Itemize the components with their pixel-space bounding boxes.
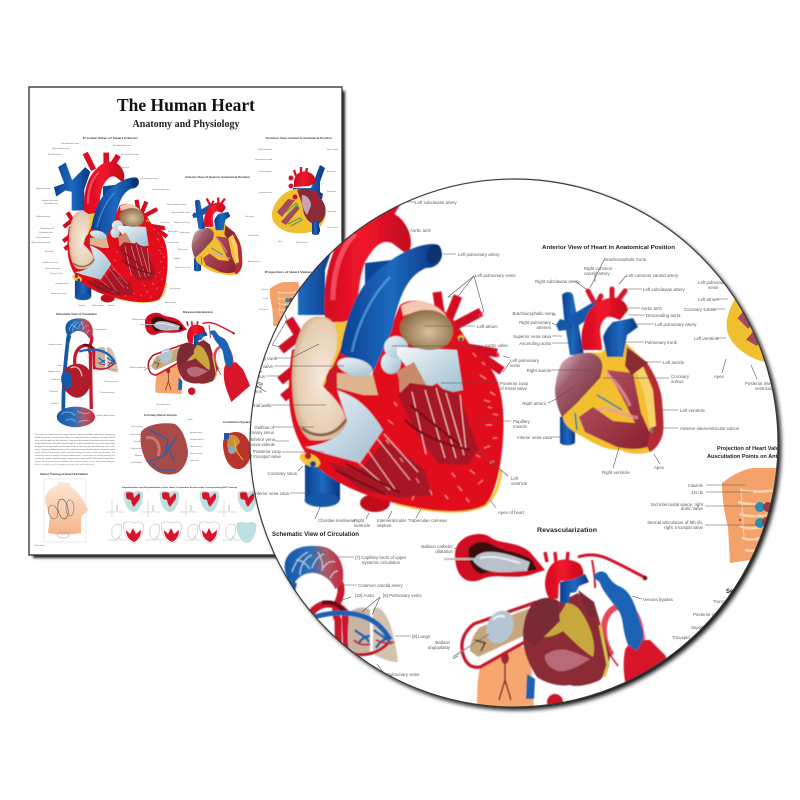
large heart labels: Left xyxy=(511,476,519,481)
large heart labels: Posterior cusp xyxy=(253,449,282,454)
valve projection title and labels: Auscultation Points on Anterior xyxy=(707,454,790,460)
poster: tiny anatomical labels: Conus arteriosus xyxy=(36,236,50,239)
poster: tiny anatomical labels: 2nd space xyxy=(259,309,268,311)
poster: explanatory paragraph: whose activity can be recorded on the body surface as the electrocardiogram. xyxy=(35,460,115,463)
anterior view labels: Coronary xyxy=(671,374,690,379)
large heart labels: Papillary xyxy=(513,419,531,424)
poster: tiny anatomical labels: Balloon angioplasty xyxy=(130,366,146,369)
poster: tiny anatomical labels: Circumflex xyxy=(133,440,142,443)
poster: explanatory paragraph xyxy=(35,433,116,466)
poster: tiny anatomical labels: Left coronary xyxy=(131,425,142,428)
anterior view labels: Left common carotid artery xyxy=(626,273,679,278)
large heart labels: cava valvule xyxy=(251,442,276,447)
poster: explanatory paragraph: atria and the right and left ventricles, separated by interatrial and interventricular septa. xyxy=(35,439,115,442)
anterior view labels: arteries xyxy=(536,325,552,330)
revascularization illustration xyxy=(444,534,680,725)
poster heading: anterior view: Anterior View of Heart in Anatomical Position xyxy=(185,175,250,179)
valve projection title and labels: 1st rib xyxy=(691,490,704,495)
valve projection title and labels: right, tricuspid valve xyxy=(664,525,704,530)
large heart labels xyxy=(230,200,540,528)
valve projection leaders xyxy=(705,485,757,525)
poster: tiny anatomical labels: Superior vena xyxy=(48,370,61,373)
poster: tiny anatomical labels: Stent placement xyxy=(156,403,170,406)
large heart labels: Pulmonary trunk xyxy=(245,356,278,361)
poster: tiny anatomical labels: Posterior vein xyxy=(130,447,142,450)
valve projection title and labels: Truncus xyxy=(713,599,730,604)
circulation leaders xyxy=(337,557,411,672)
posterior view labels xyxy=(684,280,776,391)
posterior view labels: Coronary sulcus xyxy=(684,307,717,312)
valve projection title and labels: Projection of Heart Valves xyxy=(717,446,785,452)
poster heading: projection of valves: Projection of Heart Valves and xyxy=(265,270,320,274)
poster: tiny anatomical labels: Pulmonary valve xyxy=(39,231,53,234)
poster heading: revascularization: Revascularization xyxy=(183,310,213,314)
large heart labels: Inferior vena cava xyxy=(254,491,290,496)
valve projection title and labels: Septal cusp xyxy=(691,625,715,630)
poster heart: posterior view xyxy=(272,165,326,235)
poster: explanatory paragraph: through the tricuspid valve into the right ventricle, then through the pulmonary valve to the xyxy=(35,445,116,448)
poster: tiny anatomical labels: Great cardiac xyxy=(131,433,142,436)
poster: tiny anatomical labels: Pulmonary trunk xyxy=(40,227,54,230)
poster: explanatory paragraph: Each cardiac cycle comprises systole and diastole. xyxy=(35,463,95,466)
large heart labels: Chordae tendineae xyxy=(318,518,356,523)
large heart labels: Right xyxy=(354,518,365,523)
poster: tiny anatomical labels: Small cardiac xyxy=(131,461,142,464)
large heart labels: of tricuspid valve xyxy=(248,454,282,459)
large heart labels: Posterior cusp xyxy=(500,381,529,386)
poster: explanatory paragraph: coronary arteries supply the myocardium itself. Contraction is coordinated by the xyxy=(35,454,116,457)
poster: EKG and conduction sequence xyxy=(106,491,257,543)
anterior view labels: Brachiocephalic veins xyxy=(513,311,556,316)
large heart labels: ventricle xyxy=(354,523,371,528)
circulation title and labels xyxy=(272,532,431,677)
poster: tiny anatomical labels: Left pulmonary artery xyxy=(140,177,158,180)
revascularization title and labels xyxy=(421,527,674,650)
poster: tiny anatomical labels xyxy=(31,142,338,547)
poster: tiny anatomical labels: Common carotid xyxy=(48,343,62,346)
poster heading: schematic circulation: Schematic View of Circulation xyxy=(56,312,97,316)
poster: tiny anatomical labels: Right common artery xyxy=(52,147,70,150)
poster heading: frontal view: Frontal View of Heart Interior xyxy=(83,136,139,140)
poster: tiny anatomical labels: Marginal artery xyxy=(190,452,203,455)
poster: tiny anatomical labels: Anterior artery xyxy=(190,431,202,434)
poster: tiny anatomical labels: Right subclavian xyxy=(258,148,272,151)
poster: tiny anatomical labels: Inferior vena cava xyxy=(175,266,191,269)
valve projection title and labels: Posterior cusp xyxy=(693,612,722,617)
poster: tiny anatomical labels: Left atrium xyxy=(160,221,169,224)
poster: tiny anatomical labels: Sinus xyxy=(278,241,283,243)
revascularization title and labels: Balloon xyxy=(435,640,451,645)
magnifier circle outline xyxy=(250,179,778,707)
large heart labels: Left pulmonary xyxy=(510,358,540,363)
poster: tiny anatomical labels: Right auricle xyxy=(179,231,190,234)
valve projection title and labels: Clavicle xyxy=(688,483,704,488)
large heart labels: Coronary sinus xyxy=(267,471,298,476)
poster: tiny anatomical labels: Right ventricle xyxy=(92,304,104,307)
large heart labels: muscle xyxy=(513,424,527,429)
poster: explanatory paragraph: conduction system: sinoatrial node, atrioventricular node, bundle of His and Purkinje fibers, xyxy=(35,457,115,460)
poster: tiny anatomical labels: Left subclavian artery xyxy=(121,153,139,156)
anterior view labels: Left subclavian artery xyxy=(643,287,686,292)
large heart labels: veins xyxy=(510,363,521,368)
poster: full anatomy chart xyxy=(29,87,345,558)
poster heart copy: anterior view xyxy=(192,198,242,275)
posterior view labels: veins xyxy=(708,285,719,290)
posterior view labels: Apex xyxy=(714,374,725,379)
poster: tiny anatomical labels: Apex of heart xyxy=(165,301,177,304)
poster heading: vector tracing: Vector Tracing of Heart Excitation xyxy=(40,472,88,476)
large heart frontal interior view xyxy=(260,191,503,512)
large heart labels: ventricle xyxy=(511,481,528,486)
anterior view leaders xyxy=(548,260,678,468)
posterior view leaders xyxy=(711,298,758,380)
anterior view labels: sulcus xyxy=(671,379,684,384)
anterior view heart xyxy=(555,289,663,454)
poster: tiny anatomical labels: Pulmonary xyxy=(49,390,58,393)
circulation title and labels: systemic circulation xyxy=(362,560,401,565)
poster: tiny anatomical labels: Left common carotid xyxy=(255,158,272,161)
poster: tiny anatomical labels: Superior vena cava xyxy=(174,221,191,224)
anterior view labels: Descending aorta xyxy=(646,313,681,318)
large heart labels: Right pulmonary xyxy=(230,384,263,389)
poster: explanatory paragraph: Venous blood enters the right atrium through the superior and inferior vena cavae and passes xyxy=(35,442,115,445)
anterior view labels: Right subclavian artery xyxy=(535,279,580,284)
circulation schematic xyxy=(266,546,398,779)
large heart labels: Aortic arch xyxy=(410,228,432,233)
poster: tiny anatomical labels: Inferior vena xyxy=(327,226,338,229)
large heart labels: Conus arteriosus xyxy=(232,374,266,379)
anterior view labels: Inferior vena cava xyxy=(517,435,553,440)
poster: tiny anatomical labels: Right pulmonary veins xyxy=(31,241,50,244)
large heart labels: Left pulmonary artery xyxy=(458,252,500,257)
poster: tiny anatomical labels: Pulmonary artery xyxy=(100,391,114,394)
poster: tiny anatomical labels: Brachiocephalic xyxy=(48,153,61,156)
anterior view labels xyxy=(513,245,740,475)
poster: explanatory paragraph: valve into the left ventricle, and is ejected through the aortic valve into the aorta. The xyxy=(35,451,116,454)
posterior view labels: Posterior inter- xyxy=(745,381,774,386)
anterior view labels: carotid artery xyxy=(584,271,610,276)
anterior view labels: Brachiocephalic trunk xyxy=(604,257,647,262)
poster: tiny anatomical labels: Marginal xyxy=(135,454,143,457)
circulation title and labels: [9] Lungs xyxy=(412,634,431,639)
anterior view labels: Left auricle xyxy=(663,360,685,365)
poster: tiny anatomical labels: Brachiocephalic veins xyxy=(172,211,190,214)
poster: tiny anatomical labels: Chordae xyxy=(78,304,85,307)
posterior view heart fragment xyxy=(726,299,764,362)
circulation title and labels: [7] Capillary beds of upper xyxy=(355,555,407,560)
poster: tiny anatomical labels: Aorta xyxy=(57,364,63,367)
poster: tiny anatomical labels: Aortic arch xyxy=(327,170,336,173)
poster: tiny anatomical labels: Anterior sulcus xyxy=(248,260,261,263)
anterior view labels: Right ventricle xyxy=(602,470,630,475)
anterior view labels: Right auricle xyxy=(527,368,552,373)
poster: tiny anatomical labels: Superior vena cava xyxy=(42,199,59,202)
anterior view labels: Pulmonary trunk xyxy=(645,340,678,345)
poster: tiny anatomical labels: Right pulmonary xyxy=(36,215,50,218)
poster: tiny anatomical labels: Diagonal branch xyxy=(190,438,204,441)
circulation title and labels: [10] Aorta xyxy=(355,593,374,598)
large heart labels: Left subclavian artery xyxy=(415,200,458,205)
valve projection torso xyxy=(722,468,793,563)
anterior view labels: Anterior interventricular sulcus xyxy=(680,426,740,431)
magnifier contents xyxy=(250,200,778,706)
circulation title and labels: Pulmonary veins xyxy=(387,672,420,677)
revascularization title and labels: dilatation xyxy=(435,549,454,554)
posterior view labels: Left pulmonary xyxy=(698,280,728,285)
poster heading: coronary blood vessels: Coronary Blood Vessels xyxy=(144,413,177,417)
poster: tiny anatomical labels: Right pulmonary xyxy=(36,187,50,190)
poster: tiny anatomical labels: Brachiocephalic trunk xyxy=(113,144,131,147)
anterior view labels: Left ventricle xyxy=(680,408,705,413)
poster: tiny anatomical labels: Pulmonary xyxy=(327,190,336,193)
circulation title and labels: Schematic View of Circulation xyxy=(272,532,359,538)
revascularization title and labels: Revascularization xyxy=(537,527,597,534)
poster: tiny anatomical labels: Pulmonary veins xyxy=(104,380,118,383)
revascularization title and labels: Balloon catheter xyxy=(421,544,454,549)
poster: tiny anatomical labels: Aorta xyxy=(188,418,193,421)
valve projection title and labels: Section xyxy=(726,589,748,595)
bypass vessels xyxy=(578,555,680,725)
poster: tiny anatomical labels: Clavicle xyxy=(261,289,268,291)
poster: tiny anatomical labels: 1st rib xyxy=(263,297,268,300)
valve projection title and labels: aortic valve xyxy=(681,506,704,511)
poster: tiny anatomical labels: Left auricle xyxy=(245,215,254,218)
poster: tiny anatomical labels: Coronary sinus xyxy=(55,282,68,285)
poster: explanatory paragraph: lungs. Oxygenated blood returns via the pulmonary veins to the left atrium, crosses the mitral xyxy=(35,448,116,451)
poster heading: depolarization: Depolarization and Repolarization of the Heart Conduction System with Corresponding EKG Tracing xyxy=(122,486,238,489)
poster: tiny anatomical labels: Atrial walls xyxy=(45,250,54,253)
poster title: The Human Heart xyxy=(117,95,255,115)
posterior view labels: Left atrium xyxy=(698,297,719,302)
large heart labels: Apex of heart xyxy=(498,510,525,515)
poster: tiny anatomical labels: Right carotid xyxy=(327,148,338,151)
poster: tiny anatomical labels: [4] Lungs xyxy=(108,369,116,371)
large heart labels: of mitral valve xyxy=(500,386,528,391)
poster: tiny anatomical labels: Posterior cusp xyxy=(50,272,62,275)
poster copy: circulation schematic, revascularization and valve torso xyxy=(57,282,303,427)
posterior view labels: ventricular xyxy=(755,386,776,391)
anterior view labels: Right common xyxy=(584,266,613,271)
poster: tiny anatomical labels: Left ventricle xyxy=(170,287,181,290)
poster: tiny anatomical labels: Aortic arch xyxy=(120,166,129,169)
poster: tiny anatomical labels: Right coronary xyxy=(190,445,202,448)
large heart labels: Aortic valve xyxy=(485,343,508,348)
anterior view labels: Left pulmonary artery xyxy=(655,322,697,327)
poster: conduction system heart xyxy=(223,432,251,469)
anterior view labels: Aortic arch xyxy=(641,306,663,311)
revascularization title and labels: angioplasty xyxy=(428,645,451,650)
poster: tiny anatomical labels: Posterior cusp xyxy=(167,241,179,244)
valve projection title and labels: 2nd intercostal space, right xyxy=(651,502,704,507)
poster: tiny anatomical labels: Papillary xyxy=(173,257,180,260)
poster heart copy: frontal view xyxy=(54,153,168,303)
large heart labels: Atrial walls xyxy=(250,403,272,408)
large heart labels: Outflow of xyxy=(254,425,275,430)
balloon catheter dilatation xyxy=(444,534,545,581)
poster: tiny anatomical labels: Left subclavian artery xyxy=(61,142,79,145)
poster: tiny anatomical labels: Vector loops xyxy=(34,544,44,547)
poster: tiny anatomical labels: Brachiocephalic xyxy=(259,170,272,173)
poster: coronary blood vessels heart xyxy=(141,423,188,475)
anterior view labels: Ascending aorta xyxy=(519,341,552,346)
anterior view labels: Apex xyxy=(654,465,665,470)
poster: tiny anatomical labels: Right atrium xyxy=(178,248,188,251)
poster: vector tracing torso xyxy=(44,479,88,542)
poster: tiny anatomical labels: Inferior vena cava xyxy=(45,267,61,270)
poster: tiny anatomical labels: Outflow of coronary xyxy=(42,261,58,264)
revascularization leaders xyxy=(453,548,642,659)
poster: tiny anatomical labels: Capillary xyxy=(51,402,58,405)
balloon angioplasty artery xyxy=(453,603,534,667)
poster heading: posterior view: Posterior View of Heart in Anatomical Position xyxy=(266,136,332,140)
large heart labels: Inferior vena xyxy=(251,437,276,442)
poster: tiny anatomical labels: Aortic valve xyxy=(168,230,178,233)
circulation title and labels: Common carotid artery xyxy=(358,583,403,588)
revascularization title and labels: Venous bypass xyxy=(643,597,674,602)
poster heading: conduction system: Conduction System xyxy=(223,420,252,424)
poster: tiny anatomical labels: Left ventricle xyxy=(248,234,259,237)
poster: tiny anatomical labels: Coronary sulcus xyxy=(258,191,272,194)
poster: tiny anatomical labels: Great vein xyxy=(190,459,199,462)
poster: tiny anatomical labels: Septum xyxy=(108,304,115,307)
poster: tiny anatomical labels: Ascending aorta xyxy=(44,202,59,205)
large heart labels: Left atrium xyxy=(477,324,498,329)
circulation title and labels: [8] Pulmonary veins xyxy=(383,593,422,598)
anterior view labels: Right atrium xyxy=(522,401,546,406)
posterior view labels: Left ventricle xyxy=(694,336,719,341)
leaders for large heart xyxy=(251,202,511,519)
large heart labels: septum xyxy=(377,523,392,528)
poster: tiny anatomical labels: Left pulmonary veins xyxy=(152,188,169,191)
stylized torso xyxy=(477,645,534,708)
large heart labels: Pulmonary valve xyxy=(241,364,274,369)
poster: explanatory paragraph: blood through the vessels of the body. It is composed of four chambers, the right and left xyxy=(35,436,115,439)
valve projection title and labels xyxy=(647,446,790,640)
poster: explanatory paragraph: The heart is a hollow muscular organ that lies within the middle mediastinum and pumps xyxy=(35,433,115,436)
poster: tiny anatomical labels: Portal vein xyxy=(51,378,60,381)
large heart labels: veins xyxy=(252,389,263,394)
anterior view labels: Right pulmonary xyxy=(519,320,552,325)
poster: tiny anatomical labels: Right subclavian artery xyxy=(167,203,186,206)
anterior view labels: Anterior View of Heart in Anatomical Position xyxy=(542,245,676,251)
anterior view labels: Superior vena cava xyxy=(513,334,552,339)
large heart labels: Trabeculae carneae xyxy=(408,518,447,523)
large heart labels: Left pulmonary veins xyxy=(475,273,516,278)
poster: tiny anatomical labels: Inferior vena cava xyxy=(51,292,67,295)
poster: tiny anatomical labels: Capillary beds of lower xyxy=(96,414,115,417)
poster: tiny anatomical labels: Right ventricle xyxy=(296,241,308,244)
poster subtitle: Anatomy and Physiology xyxy=(132,119,240,130)
poster: tiny anatomical labels: Balloon catheter xyxy=(132,318,146,321)
poster: tiny anatomical labels: Left atrium xyxy=(327,210,336,213)
magnifier circle background xyxy=(250,179,778,707)
large heart labels: coronary sinus xyxy=(245,430,275,435)
poster: tiny anatomical labels: [7] Capillary beds xyxy=(92,328,107,331)
large heart labels: Interventricular xyxy=(377,518,407,523)
valve projection title and labels: Tricuspid xyxy=(672,635,690,640)
magnifier circle shadow xyxy=(253,182,781,710)
revascularization heart xyxy=(523,552,610,710)
valve projection title and labels: Sternal articulation of 5th rib, xyxy=(647,520,703,525)
